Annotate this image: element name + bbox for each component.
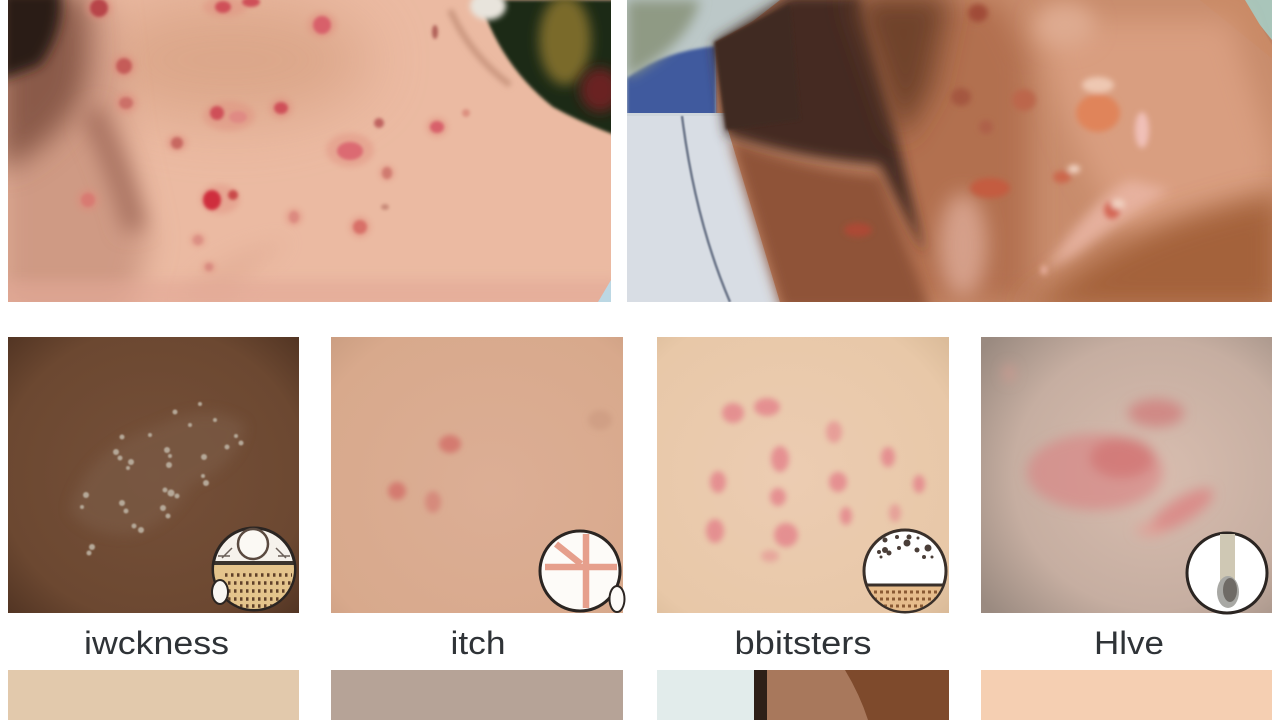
- panel: hive tile: [981, 337, 1272, 613]
- panel: bottom row partial tile 3: [657, 670, 949, 720]
- panel: bottom row partial tile 2: [331, 670, 623, 720]
- rash spots and blisters: [844, 4, 1149, 275]
- icon: dryness skin layers: [212, 528, 296, 613]
- panel: darker skin neck rash photo: [627, 0, 1280, 310]
- label: Hlve: Hlve: [1094, 625, 1164, 661]
- flaky patch: [70, 402, 245, 556]
- rash spot halos: [76, 0, 448, 273]
- panel: light skin neck rash photo: [0, 0, 620, 310]
- panel: blisters tile: [657, 337, 949, 613]
- icon: hive swab: [1187, 533, 1267, 613]
- label: bbitsters: bbitsters: [734, 625, 872, 661]
- panel: dryness tile: [8, 337, 299, 613]
- label: itch: itch: [450, 625, 506, 661]
- rash spots: [81, 0, 470, 271]
- panel: bottom row partial tile 4: [981, 670, 1272, 720]
- icon: blisters skin layers: [862, 530, 948, 616]
- label: iwckness: iwckness: [84, 625, 229, 661]
- panel: itch tile: [331, 337, 623, 613]
- icon: itch cross marks: [540, 531, 624, 612]
- skin shading: [714, 0, 1280, 310]
- panel: bottom row partial tile 1: [8, 670, 299, 720]
